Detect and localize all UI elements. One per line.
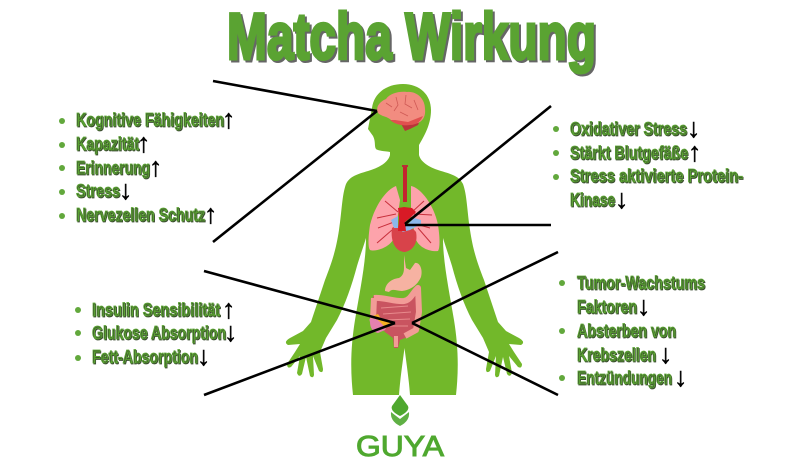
- list: cancer and inflammation effects: ↓: [637, 291, 650, 321]
- logo: GUYA: GUYA: [356, 431, 445, 463]
- list: cancer and inflammation effects: [559, 273, 705, 392]
- logo: GUYA: [356, 395, 445, 463]
- list: heart effects: ↓: [615, 184, 628, 214]
- list: cancer and inflammation effects: ↓: [659, 339, 672, 369]
- list: heart effects: ↑: [688, 137, 702, 167]
- organ: lungs: [368, 186, 440, 251]
- list: brain effects: ↑: [204, 199, 218, 229]
- list: cancer and inflammation effects: Tumor-Wachstums: [577, 273, 705, 293]
- list: cancer and inflammation effects: ↓: [674, 362, 688, 392]
- list: heart effects: Stärkt Blutgefäße: [570, 143, 688, 163]
- list: cancer and inflammation effects: Absterben von: [577, 321, 676, 341]
- list: brain effects: ↓: [119, 175, 132, 205]
- list: gut effects: ↑: [222, 294, 236, 324]
- list: brain effects: ↑: [149, 152, 162, 182]
- list: brain effects: [59, 104, 236, 229]
- organ: intestines: [369, 286, 421, 348]
- list: brain effects: Kognitive Fähigkeiten: [76, 110, 224, 130]
- list: brain effects: ↑: [222, 104, 236, 134]
- list: heart effects: Kinase: [570, 190, 615, 210]
- title: Matcha Wirkung: [227, 0, 596, 73]
- list: heart effects: Oxidativer Stress: [570, 119, 687, 139]
- connector lines: [204, 81, 558, 395]
- list: heart effects: [553, 113, 743, 214]
- list: brain effects: Nervezellen Schutz: [76, 205, 205, 225]
- list: heart effects: Stress aktivierte Protein-: [570, 166, 743, 186]
- list: gut effects: Insulin Sensibilität: [92, 300, 220, 320]
- list: cancer and inflammation effects: Krebszellen: [577, 345, 656, 365]
- list: brain effects: Erinnerung: [76, 158, 150, 178]
- organ: stomach: [385, 255, 422, 292]
- list: heart effects: ↓: [687, 113, 700, 143]
- list: brain effects: Stress: [76, 181, 120, 201]
- list: brain effects: Kapazität: [76, 134, 139, 154]
- icon: leaf: [391, 395, 409, 426]
- body silhouette: [286, 84, 523, 395]
- list: brain effects: ↑: [137, 128, 150, 158]
- list: cancer and inflammation effects: Entzündungen: [577, 368, 672, 388]
- list: gut effects: ↓: [224, 317, 238, 347]
- organ: brain: [377, 92, 425, 131]
- organ: heart and vessels: [377, 165, 432, 252]
- title: Matcha Wirkung: [229, 1, 598, 75]
- list: gut effects: Fett-Absorption: [92, 347, 198, 367]
- list: gut effects: Glukose Absorption: [92, 323, 226, 343]
- list: gut effects: [75, 294, 238, 371]
- list: cancer and inflammation effects: Faktoren: [577, 297, 637, 317]
- list: gut effects: ↓: [197, 341, 210, 371]
